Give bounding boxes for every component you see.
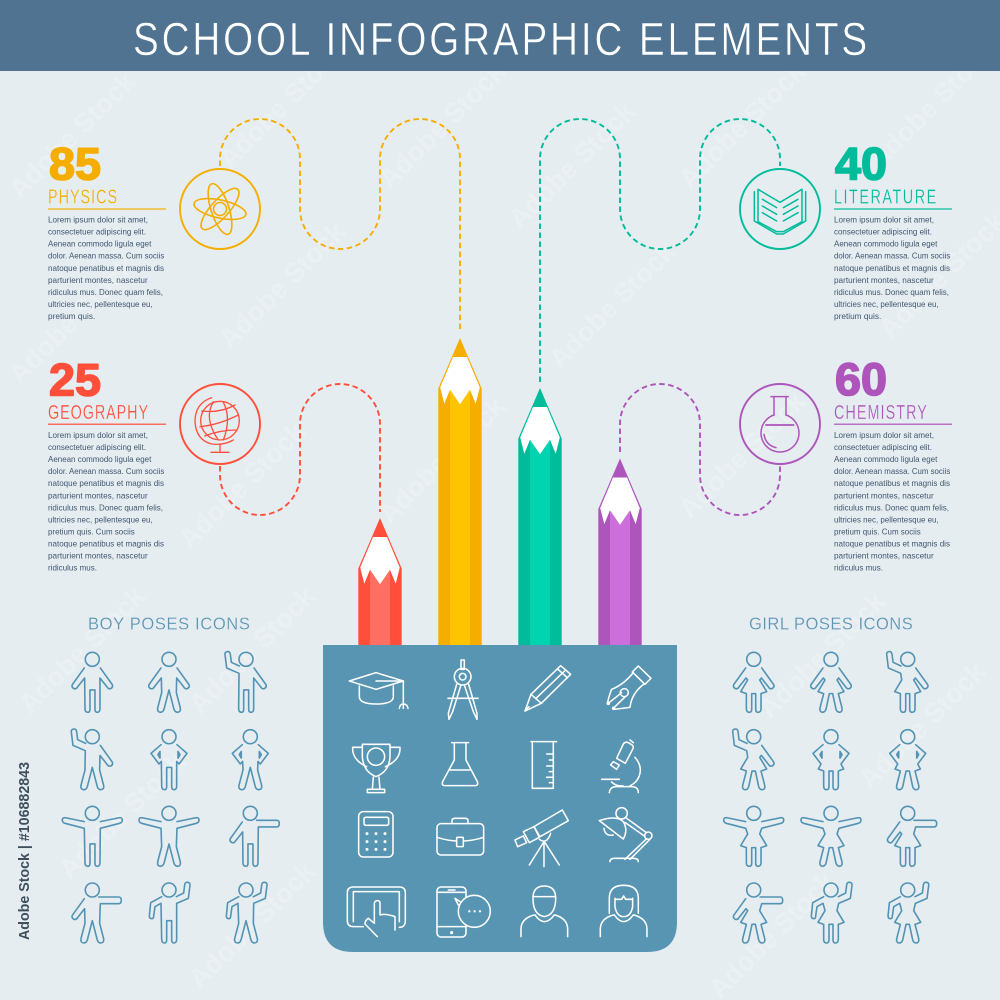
icon: fountain pen nib [607,666,651,709]
text: Adobe Stock [213,216,352,354]
physics text: dolor. Aenean massa. Cum sociis [48,251,164,261]
panel: geography [48,354,260,573]
literature text: Aenean commodo ligula eget [834,239,938,249]
physics text: ultricies nec, pellentesque eu, [48,299,153,309]
icon: open book [740,169,820,249]
geography text: ultricies nec, pellentesque eu, [48,514,153,524]
panel: physics [48,138,260,321]
panel: literature [740,138,952,321]
geography text: ridiculus mus. [48,563,97,573]
heading: girl poses: GIRL POSES ICONS [749,613,913,634]
chemistry heading: CHEMISTRY [834,401,927,424]
physics text: natoque penatibus et magnis dis [48,263,164,273]
chemistry text: parturient montes, nascetur [834,551,934,561]
text: Adobe Stock [673,56,812,194]
literature text: dolor. Aenean massa. Cum sociis [834,251,950,261]
icon: pencil [525,666,571,711]
icon: beaker [531,742,557,788]
panel: school icons pocket [323,645,677,952]
text: Adobe Stock [3,66,142,204]
dashed line: geography [220,384,380,515]
chemistry text: natoque penatibus et magnis dis [834,478,950,488]
geography heading: GEOGRAPHY [48,401,148,424]
icon: globe [180,384,260,464]
icon: boy student [521,886,568,937]
icon: telescope [515,810,568,867]
geography text [48,430,164,573]
geography text: natoque penatibus et magnis dis [48,538,164,548]
pencil: literature [518,388,562,645]
text: Adobe Stock [373,56,512,194]
title: SCHOOL INFOGRAPHIC ELEMENTS [133,14,867,65]
text: Adobe Stock [183,581,322,719]
heading: boy poses: BOY POSES ICONS [88,613,250,634]
chemistry text: parturient montes, nascetur [834,490,934,500]
chemistry text: ultricies nec, pellentesque eu, [834,514,939,524]
chemistry text: Aenean commodo ligula eget [834,454,938,464]
physics text: consectetuer adipiscing elit. [48,227,146,237]
pencil: geography [358,518,402,645]
physics text: Aenean commodo ligula eget [48,239,152,249]
physics text: parturient montes, nascetur [48,275,148,285]
physics heading: PHYSICS [48,185,117,208]
text: Adobe Stock [13,581,152,719]
icon: girl student [600,885,647,937]
chemistry text: Lorem ipsum dolor sit amet, [834,430,934,440]
text: Adobe Stock [863,36,1000,174]
geography text: parturient montes, nascetur [48,551,148,561]
text: Adobe Stock [183,856,322,994]
chemistry text: consectetuer adipiscing elit. [834,442,932,452]
icon: phone with chat bubble [437,887,490,937]
text: Adobe Stock [173,416,312,554]
boy pose icons [62,652,279,943]
icon: graduation cap [349,673,408,708]
text: Adobe Stock [213,36,352,174]
literature text: parturient montes, nascetur [834,275,934,285]
icon: calculator [359,812,393,857]
literature text: consectetuer adipiscing elit. [834,227,932,237]
geography text: consectetuer adipiscing elit. [48,442,146,452]
literature heading: LITERATURE [834,185,936,208]
literature text: natoque penatibus et magnis dis [834,263,950,273]
geography text: dolor. Aenean massa. Cum sociis [48,466,164,476]
icon: erlenmeyer flask [442,743,478,786]
literature text [834,214,950,321]
chemistry text: ridiculus mus. [834,563,883,573]
text: Adobe Stock [543,236,682,374]
dashed line: physics [220,119,460,332]
literature text: ultricies nec, pellentesque eu, [834,299,939,309]
literature text: Lorem ipsum dolor sit amet, [834,214,934,224]
icon: tablet touch [347,887,405,937]
text: Adobe Stock [503,96,642,234]
text: Adobe Stock [673,386,812,524]
icon: atom [180,169,260,249]
icon: briefcase [437,818,484,855]
icon: round flask [740,384,820,464]
physics text: pretium quis. [48,311,95,321]
text: Adobe Stock [3,251,142,389]
dashed line: chemistry [620,384,780,515]
icon: microscope [602,740,640,793]
girl pose icons [724,652,937,943]
geography text: Aenean commodo ligula eget [48,454,152,464]
literature text: ridiculus mus. Donec quam felis, [834,287,949,297]
text: Adobe Stock [53,746,192,884]
text: Adobe Stock [853,656,992,794]
chemistry text: natoque penatibus et magnis dis [834,538,950,548]
text: Adobe Stock [373,391,512,529]
geography value: 25 [49,354,101,406]
header banner [0,0,1000,71]
icon: trophy [353,744,400,793]
geography text: parturient montes, nascetur [48,490,148,500]
physics value: 85 [49,138,101,190]
physics text: ridiculus mus. Donec quam felis, [48,287,163,297]
icon: compass [448,660,478,719]
panel: chemistry [740,354,952,573]
geography text: ridiculus mus. Donec quam felis, [48,502,163,512]
geography text: Lorem ipsum dolor sit amet, [48,430,148,440]
chemistry text [834,430,950,573]
pencil: physics [438,338,482,645]
literature value: 40 [835,138,887,190]
physics text: Lorem ipsum dolor sit amet, [48,214,148,224]
chemistry value: 60 [835,354,887,405]
chemistry text: dolor. Aenean massa. Cum sociis [834,466,950,476]
physics text [48,214,164,321]
dashed line: literature [540,119,780,382]
geography text: pretium quis. Cum sociis [48,526,135,536]
pencil: chemistry [598,458,642,645]
literature text: pretium quis. [834,311,881,321]
chemistry text: ridiculus mus. Donec quam felis, [834,502,949,512]
chemistry text: pretium quis. Cum sociis [834,526,921,536]
text: Adobe Stock [753,586,892,724]
side credit text: Adobe Stock | #106882843 [16,762,33,940]
icon: desk lamp [599,808,652,862]
geography text: natoque penatibus et magnis dis [48,478,164,488]
